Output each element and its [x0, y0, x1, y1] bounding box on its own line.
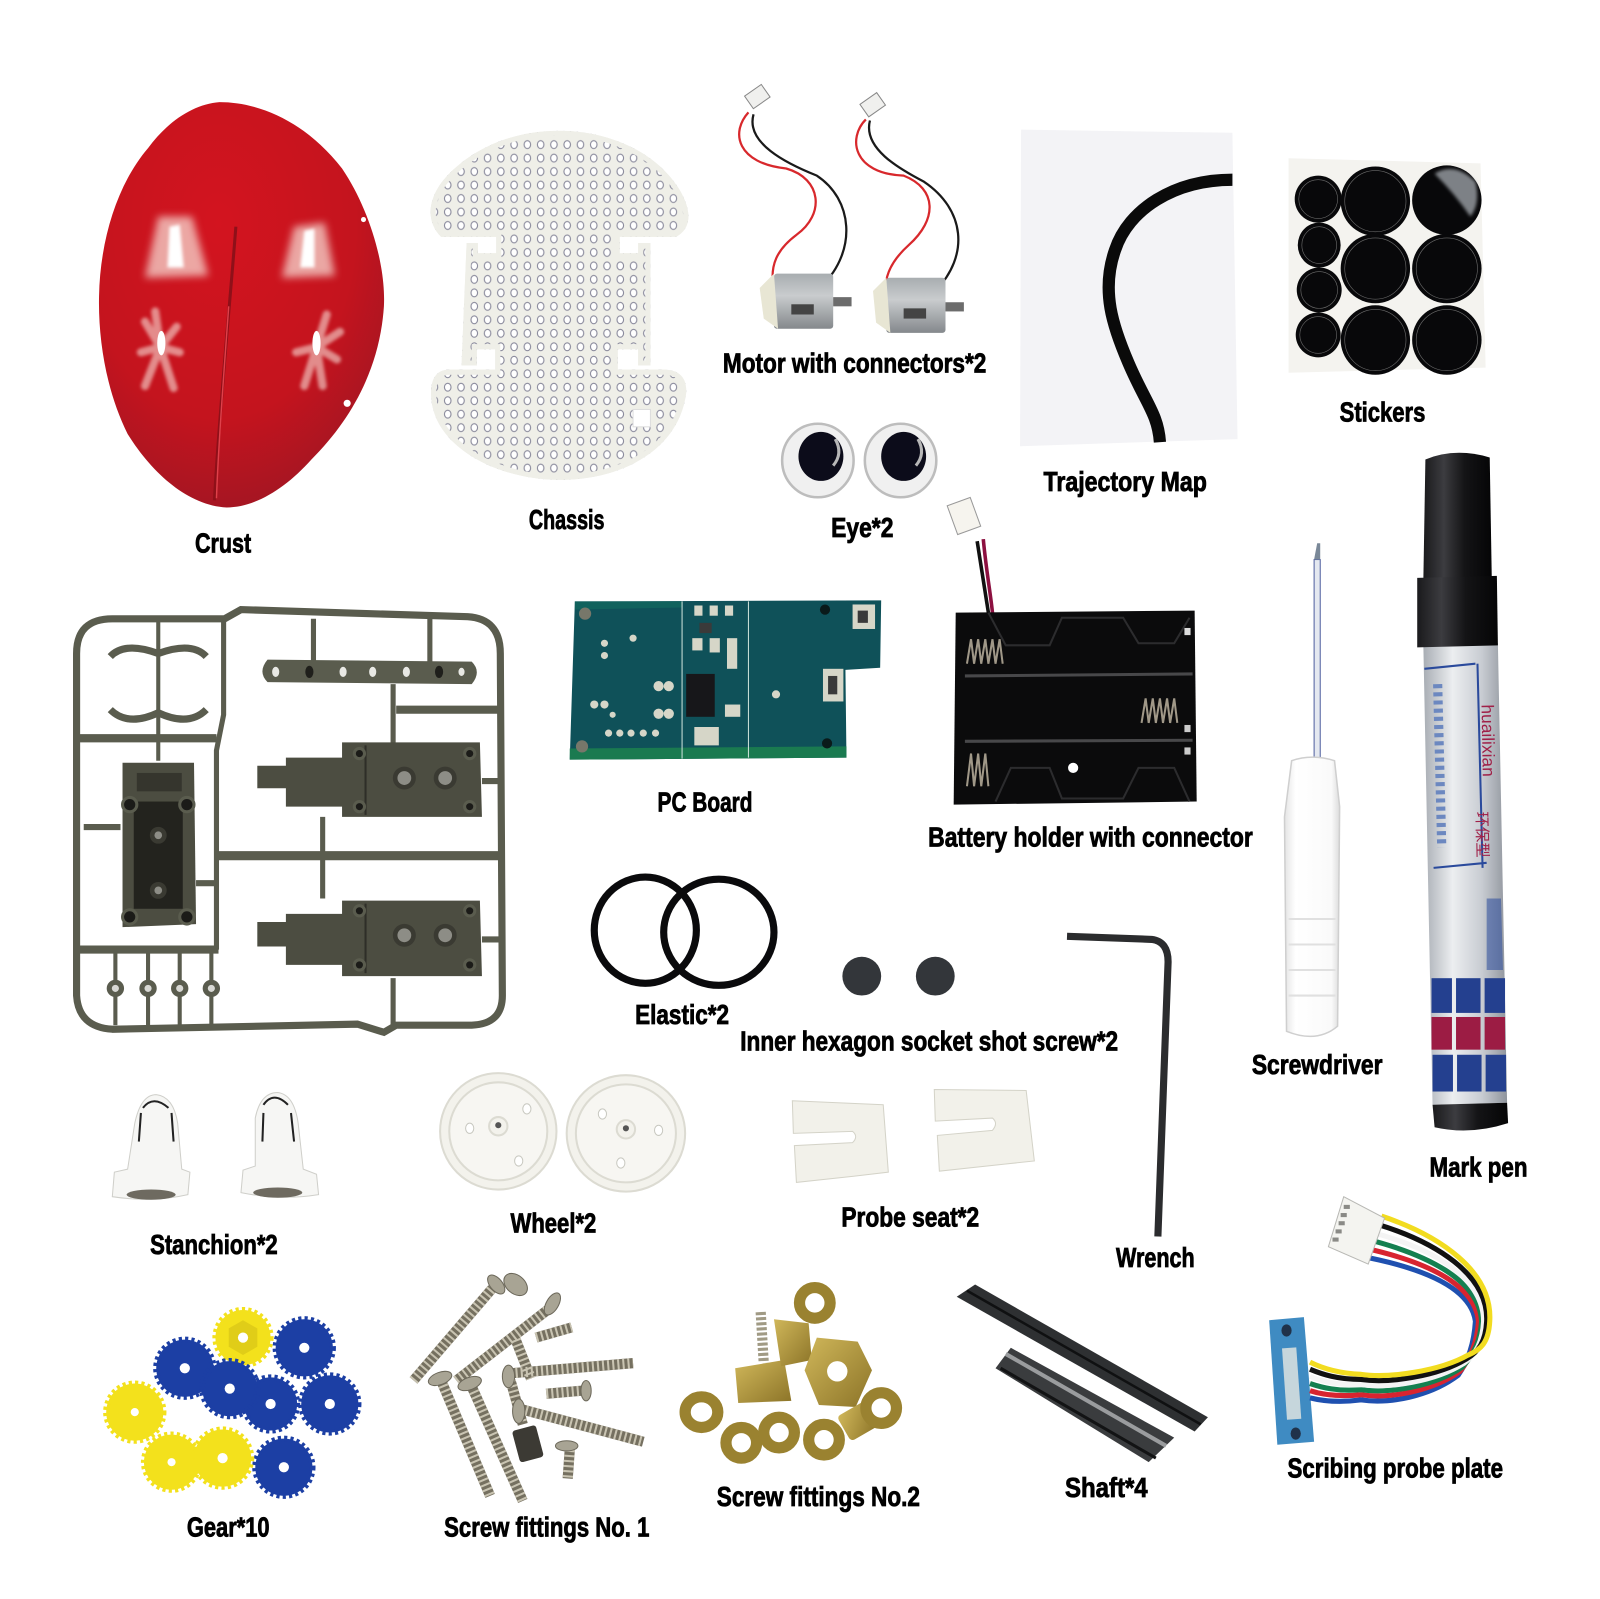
label: Chassis: Chassis	[529, 504, 604, 535]
icon: perforated chassis plate	[430, 130, 688, 480]
label: Trajectory Map: Trajectory Map	[1044, 466, 1207, 497]
icon: googly eyes	[782, 424, 936, 497]
label: Mark pen: Mark pen	[1429, 1151, 1528, 1182]
panel: socket screws	[740, 957, 1118, 1057]
panel: stickers	[1289, 158, 1486, 428]
panel: chassis	[430, 130, 688, 530]
label: Wrench: Wrench	[1116, 1242, 1195, 1273]
label: Inner hexagon socket shot screw*2: Inner hexagon socket shot screw*2	[740, 1026, 1118, 1057]
label: Probe seat*2: Probe seat*2	[841, 1201, 979, 1232]
icon: steel screws	[414, 1289, 643, 1501]
label: PC Board: PC Board	[658, 787, 753, 818]
panel: screw fittings two	[685, 1288, 920, 1512]
icon: marker pen: 环保型	[1472, 812, 1490, 858]
icon: map sheet with curve	[1020, 130, 1238, 446]
label: Battery holder with connector: Battery holder with connector	[928, 821, 1253, 852]
icon: circuit board	[570, 600, 881, 760]
label: Crust: Crust	[195, 527, 251, 558]
icon: four metal rods	[957, 1285, 1208, 1462]
icon: motor one with wires	[739, 84, 852, 329]
icon: right stanchion	[241, 1093, 319, 1198]
icon: hex key	[1067, 936, 1168, 1237]
label: Eye*2: Eye*2	[831, 512, 893, 543]
label: Screwdriver: Screwdriver	[1252, 1049, 1383, 1080]
panel: wheels	[440, 1073, 685, 1238]
icon: brass fittings	[685, 1288, 896, 1458]
panel: mark pen	[1417, 453, 1528, 1182]
panel: screw fittings one	[414, 1269, 649, 1543]
panel: motors	[723, 84, 986, 379]
icon: probe board with ribbon	[1269, 1197, 1490, 1445]
icon: two hex screws	[842, 957, 955, 996]
panel: wrench	[1067, 936, 1195, 1273]
icon: sprue frame with parts	[77, 610, 502, 1032]
panel: stanchions	[112, 1093, 319, 1260]
label: Screw fittings No. 1: Screw fittings No. 1	[444, 1512, 649, 1543]
icon: marker pen: huailixian	[1478, 704, 1499, 777]
panel: screwdriver	[1252, 543, 1383, 1080]
icon: marker pen	[1417, 453, 1508, 1131]
label: Motor with connectors*2: Motor with connectors*2	[723, 348, 986, 379]
label: Elastic*2: Elastic*2	[635, 999, 729, 1030]
panel: battery holder	[928, 497, 1253, 852]
label: Scribing probe plate: Scribing probe plate	[1288, 1452, 1503, 1483]
panel: probe seats	[792, 1089, 1034, 1232]
label: Shaft*4: Shaft*4	[1065, 1472, 1148, 1503]
panel: plastic sprue	[77, 610, 502, 1032]
icon: left stanchion	[112, 1095, 190, 1200]
icon: gear pile	[106, 1310, 358, 1496]
icon: two probe seats	[792, 1089, 1034, 1182]
icon: screwdriver	[1284, 543, 1340, 1036]
label: Stanchion*2: Stanchion*2	[150, 1229, 278, 1260]
label: Gear*10: Gear*10	[187, 1512, 270, 1543]
panel: scribing probe plate	[1269, 1197, 1503, 1483]
icon: two rubber rings	[594, 877, 774, 985]
icon: two wheels	[440, 1073, 685, 1192]
icon: red shell	[99, 102, 384, 507]
panel: gears	[106, 1310, 358, 1543]
panel: trajectory map	[1020, 130, 1238, 497]
label: Screw fittings No.2: Screw fittings No.2	[717, 1481, 920, 1512]
label: Wheel*2: Wheel*2	[511, 1207, 596, 1238]
panel: crust	[99, 102, 384, 558]
label: Stickers: Stickers	[1340, 397, 1425, 428]
icon: sticker sheet	[1289, 158, 1486, 375]
icon: battery holder with connector	[947, 497, 1197, 805]
panel: eyes	[782, 424, 936, 543]
panel: PC board	[570, 600, 881, 818]
panel: elastic bands	[594, 877, 774, 1030]
panel: shafts	[957, 1285, 1208, 1503]
icon: motor two with wires	[856, 93, 964, 333]
